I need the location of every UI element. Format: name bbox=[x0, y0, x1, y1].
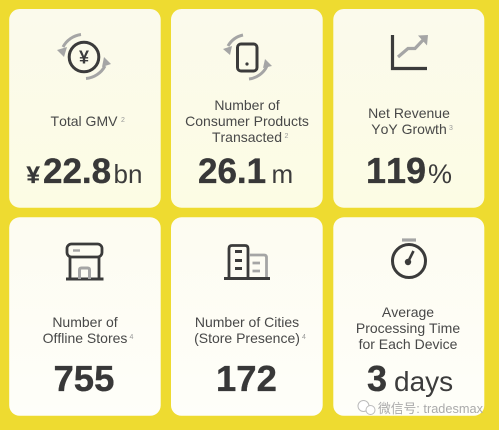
value: 3 days: days bbox=[394, 366, 453, 397]
watermark: 微信号: tradesmax bbox=[378, 401, 483, 416]
label: average processing time: for Each Device bbox=[359, 336, 458, 352]
panel: processing time bbox=[333, 217, 484, 416]
icon: store bbox=[66, 244, 104, 279]
value: 119%: 119 bbox=[366, 150, 426, 191]
panel: consumer products transacted bbox=[171, 9, 323, 208]
label: number of cities store presence: (Store Presence) bbox=[194, 330, 300, 346]
value: ¥22.8bn: ¥ bbox=[26, 162, 40, 189]
label: total GMV: Total GMV bbox=[51, 113, 118, 129]
icon: stopwatch bbox=[392, 240, 426, 278]
icon: rotating phone bbox=[223, 35, 272, 79]
label: number of cities store presence: Number of Cities bbox=[195, 314, 299, 330]
value: ¥22.8bn: bn bbox=[114, 159, 142, 189]
label: number of offline stores: Offline Stores bbox=[43, 330, 127, 346]
label: number of offline stores: Number of bbox=[52, 314, 118, 330]
icon: rotating yen coin bbox=[57, 34, 111, 78]
label: number of consumer products transacted: Consumer Products bbox=[185, 113, 309, 129]
icon: buildings bbox=[224, 246, 270, 278]
footnote mark: 4 bbox=[302, 334, 306, 341]
value: 119%: % bbox=[428, 159, 452, 189]
value: 3 days: 3 bbox=[367, 358, 387, 399]
footnote mark: 4 bbox=[130, 334, 134, 341]
label: net revenue yoy growth: YoY Growth bbox=[371, 121, 447, 137]
footnote mark: 2 bbox=[121, 117, 125, 124]
value: 755: 755 bbox=[54, 358, 114, 399]
label: average processing time: Average bbox=[382, 304, 434, 320]
panel: total GMV bbox=[9, 9, 161, 208]
value: 172: 172 bbox=[216, 358, 277, 399]
icon: rotating yen coin: ¥ bbox=[79, 48, 89, 68]
value: ¥22.8bn: 22.8 bbox=[43, 152, 111, 191]
footnote mark: 3 bbox=[449, 125, 453, 132]
panel: net revenue growth bbox=[333, 9, 484, 208]
icon: growth chart bbox=[392, 35, 428, 68]
label: number of consumer products transacted: Transacted bbox=[212, 129, 282, 145]
label: number of consumer products transacted: Number of bbox=[214, 97, 280, 113]
panel: offline stores bbox=[9, 217, 161, 416]
value: 26.1m: m bbox=[272, 159, 293, 189]
panel: cities bbox=[171, 217, 323, 416]
label: average processing time: Processing Time bbox=[356, 320, 460, 336]
value: 26.1m: 26.1 bbox=[198, 152, 266, 191]
label: net revenue yoy growth: Net Revenue bbox=[368, 105, 450, 121]
footnote mark: 2 bbox=[284, 133, 288, 140]
